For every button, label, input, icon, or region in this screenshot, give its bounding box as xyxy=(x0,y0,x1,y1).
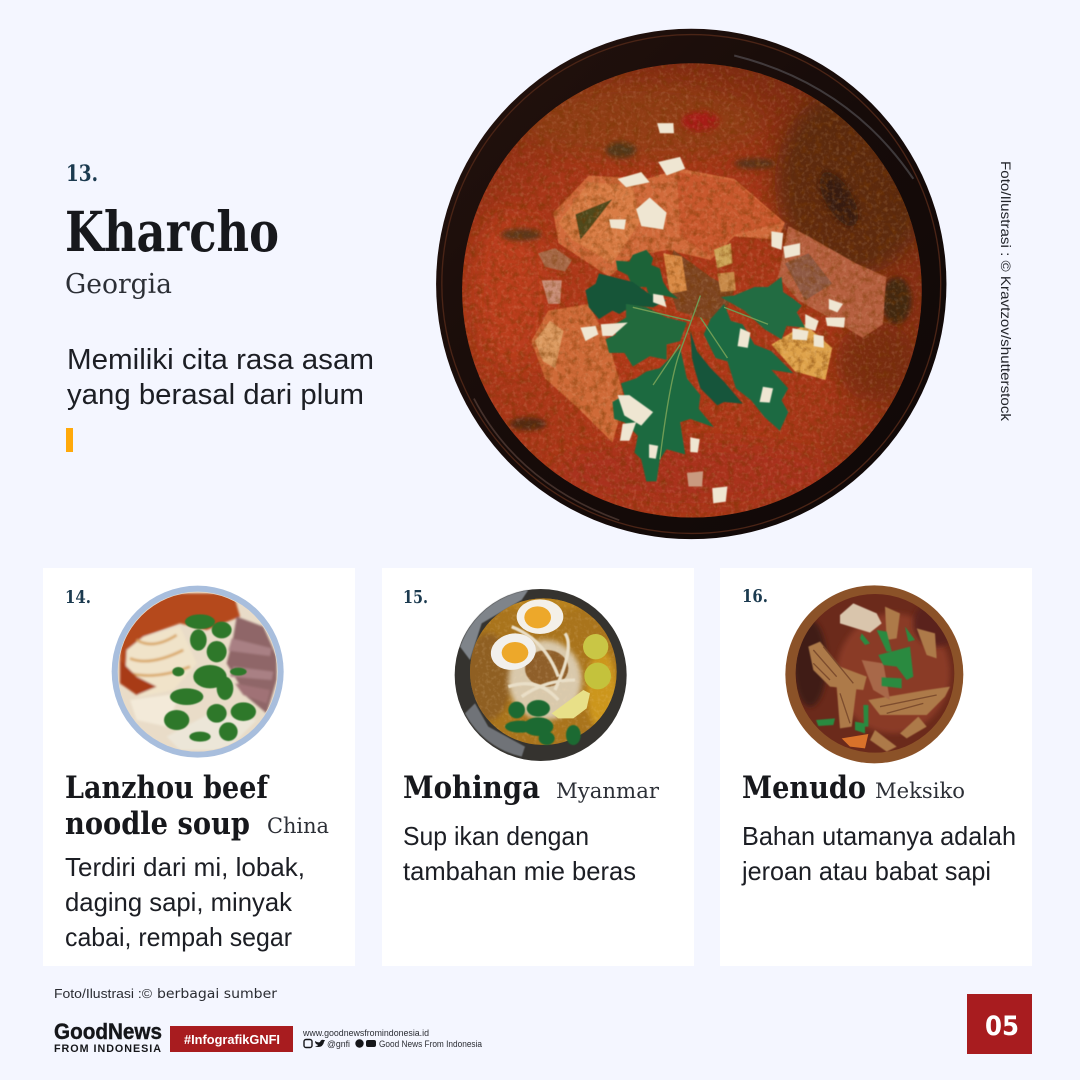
icon: twitter xyxy=(315,1040,325,1047)
orange accent bar xyxy=(66,428,73,452)
description xyxy=(403,821,636,886)
item number 13: 13. xyxy=(66,161,98,187)
footer photo credit: Foto/Ilustrasi :© xyxy=(54,986,152,1001)
main image: bowl of kharcho xyxy=(436,29,946,539)
lime wedge xyxy=(552,690,590,718)
cilantro xyxy=(505,700,581,745)
description: Bahan utamanya adalah xyxy=(742,821,1016,851)
description: Sup ikan dengan xyxy=(403,821,589,851)
heading block: Kharcho xyxy=(65,161,374,452)
number 16: 16. xyxy=(742,586,768,607)
egg halves xyxy=(517,599,563,634)
description: yang berasal dari plum xyxy=(67,379,364,411)
page number: 05 xyxy=(985,1011,1019,1042)
number 14: 14. xyxy=(65,587,91,608)
title: Lanzhou beef xyxy=(65,770,269,806)
social media links: Good News From Indonesia xyxy=(379,1039,482,1049)
icon: instagram xyxy=(304,1040,312,1048)
description xyxy=(741,821,1016,886)
garlic chips xyxy=(580,123,845,503)
image: Menudo bowl xyxy=(785,585,963,763)
title: noodle soup xyxy=(65,806,250,842)
logo: GoodNews From Indonesia: FROM INDONESIA xyxy=(54,1043,162,1055)
logo: GoodNews From Indonesia: GoodNews xyxy=(54,1019,162,1044)
country: Myanmar xyxy=(556,779,660,803)
bowl rim xyxy=(436,29,946,539)
social media links xyxy=(302,1028,482,1049)
logo: GoodNews From Indonesia xyxy=(54,1019,162,1055)
title xyxy=(65,770,269,842)
parsley xyxy=(585,250,805,481)
country: China xyxy=(267,814,329,838)
country Georgia: Georgia xyxy=(65,269,172,300)
page number xyxy=(967,994,1032,1054)
description xyxy=(67,344,374,411)
country: Meksiko xyxy=(875,779,965,803)
title: Mohinga xyxy=(403,770,540,806)
panel: card 16 Menudo xyxy=(720,568,1032,966)
description: Terdiri dari mi, lobak, xyxy=(65,852,305,882)
panel: card 14 Lanzhou beef noodle soup xyxy=(43,568,355,966)
noodle strands xyxy=(508,627,575,700)
image: Mohinga bowl xyxy=(455,589,627,761)
herbs in soup xyxy=(501,111,912,431)
description: jeroan atau babat sapi xyxy=(741,856,991,886)
icon: youtube xyxy=(366,1040,376,1047)
texture overlay xyxy=(460,61,927,520)
panel: card 15 Mohinga xyxy=(382,568,694,966)
soup xyxy=(462,63,922,518)
footer photo credit xyxy=(54,986,278,1002)
vertical photo credit: Foto/Ilustrasi : © Kravtzov/shutterstock xyxy=(998,161,1013,421)
description: daging sapi, minyak xyxy=(65,887,293,917)
meat pieces xyxy=(531,169,886,442)
icon: facebook xyxy=(355,1039,364,1048)
title: Menudo xyxy=(742,770,866,806)
tripe and vegetables xyxy=(840,603,882,633)
description xyxy=(65,852,305,952)
hashtag badge: #InfografikGNFI xyxy=(184,1032,280,1047)
hashtag badge xyxy=(170,1026,293,1052)
title Kharcho: Kharcho xyxy=(65,199,279,264)
social media links: www.goodnewsfromindonesia.id xyxy=(302,1028,429,1038)
description: cabai, rempah segar xyxy=(65,922,292,952)
dumplings xyxy=(583,634,608,659)
description: Memiliki cita rasa asam xyxy=(67,344,374,376)
image: Lanzhou noodle bowl xyxy=(112,586,284,758)
social media links: @gnfi xyxy=(327,1039,350,1049)
number 15: 15. xyxy=(403,587,428,608)
description: tambahan mie beras xyxy=(403,856,636,886)
footer photo credit: berbagai sumber xyxy=(157,987,278,1002)
